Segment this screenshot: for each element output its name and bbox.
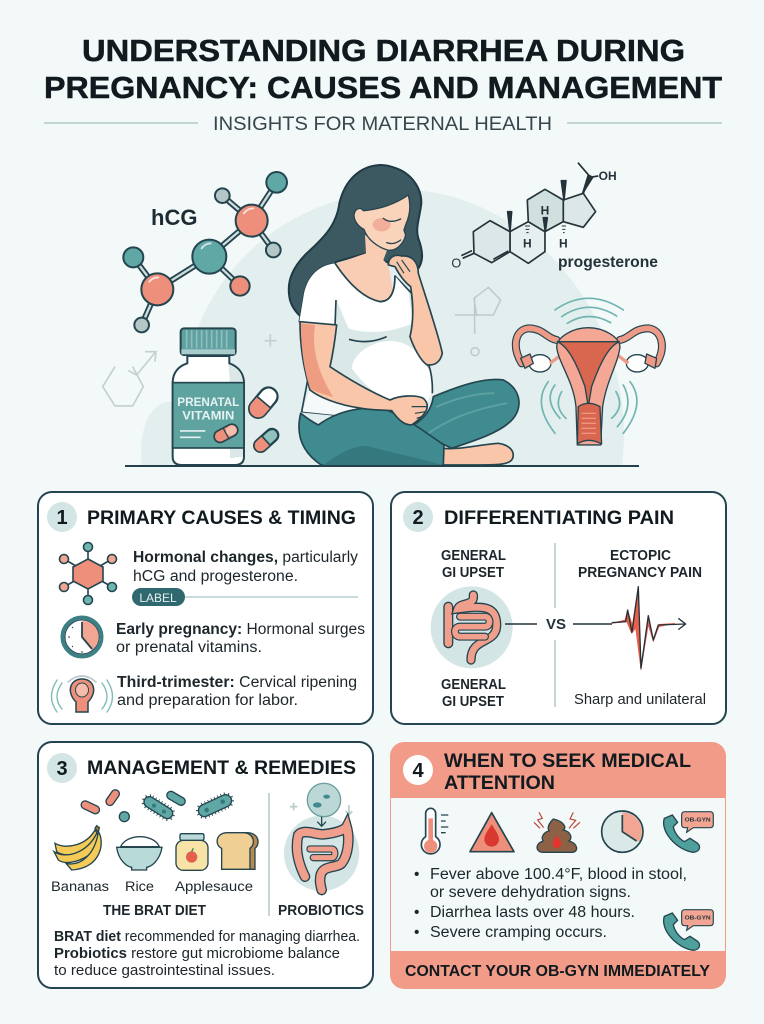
number badge 1 xyxy=(47,502,77,532)
number badge 1: 1 xyxy=(56,507,68,529)
heading 4: ATTENTION xyxy=(444,773,555,794)
text: third trimester: and preparation for labor. xyxy=(117,692,298,709)
heading 4 xyxy=(444,751,691,794)
label: general GI upset bottom: GI UPSET xyxy=(442,694,504,710)
icon: phone OB-GYN xyxy=(664,812,713,852)
text: early pregnancy: or prenatal vitamins. xyxy=(116,639,262,656)
front leg xyxy=(299,408,444,465)
icon: progesterone structure: OH xyxy=(599,169,617,183)
icon: clock 48 hours xyxy=(602,811,643,852)
panel 1: primary causes and timing xyxy=(38,492,373,724)
text: third trimester xyxy=(117,674,357,709)
foot xyxy=(442,443,513,465)
text: warning signs list: • xyxy=(414,924,419,941)
labels: foods: Rice xyxy=(125,878,154,894)
label pill xyxy=(132,588,358,606)
label: general GI upset top: GI UPSET xyxy=(442,565,504,581)
hair xyxy=(289,165,422,318)
icon: applesauce jar xyxy=(176,834,208,870)
text: warning signs list: Severe cramping occurs. xyxy=(430,924,607,941)
label: progesterone: progesterone xyxy=(558,254,658,271)
number badge 3: 3 xyxy=(56,758,68,780)
heading 2: DIFFERENTIATING PAIN xyxy=(444,508,674,529)
shirt white upper xyxy=(299,263,413,332)
title: PREGNANCY: CAUSES AND MANAGEMENT xyxy=(44,70,722,105)
illustration: pregnant woman xyxy=(289,165,519,465)
panel 4: when to seek medical attention xyxy=(390,742,726,989)
subtitle: INSIGHTS FOR MATERNAL HEALTH xyxy=(213,114,552,135)
shirt shaded base xyxy=(299,263,432,417)
icon: toast xyxy=(217,833,258,869)
shirt hem white xyxy=(303,380,363,415)
right arm and hand xyxy=(388,255,442,365)
title xyxy=(44,33,722,105)
number badge 2 xyxy=(403,502,433,532)
neck and chest xyxy=(335,235,392,302)
heading 1: PRIMARY CAUSES & TIMING xyxy=(87,508,356,529)
text: early pregnancy: Early pregnancy: Hormonal surges xyxy=(116,621,365,638)
icon: progesterone structure: H xyxy=(523,237,532,251)
text: hormonal changes xyxy=(133,549,358,585)
heading 3: MANAGEMENT & REMEDIES xyxy=(87,758,356,779)
icon: hCG molecule xyxy=(123,172,287,332)
icon: pain spike line xyxy=(612,587,686,670)
icon: stool with blood xyxy=(534,812,580,852)
belly xyxy=(352,341,432,405)
illustration background blob xyxy=(141,190,624,466)
icon: prenatal vitamin bottle xyxy=(173,328,282,465)
icon: gut bacteria xyxy=(80,788,234,822)
number badge 3 xyxy=(47,753,77,783)
text: management paragraph: BRAT diet recommended for managing diarrhea. xyxy=(54,929,360,945)
heading 4: WHEN TO SEEK MEDICAL xyxy=(444,751,691,772)
icon: probiotics colon xyxy=(284,783,359,891)
text: hormonal changes: hCG and progesterone. xyxy=(133,568,298,585)
text: sharp and unilateral: Sharp and unilateral xyxy=(574,692,706,708)
icon: progesterone structure: H xyxy=(541,204,549,218)
face xyxy=(354,195,410,250)
icon: phone OB-GYN second: OB-GYN xyxy=(685,916,711,922)
icon: hormone molecule xyxy=(60,542,116,604)
icon: bananas xyxy=(54,826,101,870)
text: management paragraph xyxy=(54,929,360,979)
icon: phone OB-GYN second xyxy=(664,910,713,950)
label: probiotics: PROBIOTICS xyxy=(278,903,364,919)
panel 2: differentiating pain xyxy=(391,492,726,724)
icon: thermometer xyxy=(421,808,448,854)
label: general GI upset bottom: GENERAL xyxy=(441,677,506,693)
icon: prenatal vitamin bottle: PRENATAL xyxy=(177,396,239,409)
label: ectopic pregnancy pain: ECTOPIC xyxy=(610,548,671,564)
text: warning signs list xyxy=(414,866,687,941)
vibration waves around uterus xyxy=(541,298,637,433)
labels: foods: Bananas xyxy=(51,878,109,894)
label: hCG: hCG xyxy=(151,205,197,230)
text: management paragraph: Probiotics restore gut microbiome balance xyxy=(54,946,340,962)
text: management paragraph: to reduce gastrointestinal issues. xyxy=(54,963,275,979)
icon: progesterone structure xyxy=(451,163,617,270)
text: warning signs list: Diarrhea lasts over 48 hours. xyxy=(430,904,635,921)
number badge 4: 4 xyxy=(412,760,424,782)
text: warning signs list: • xyxy=(414,866,419,883)
panel 3: management and remedies xyxy=(38,742,373,988)
labels: foods xyxy=(51,878,253,894)
icon: intestines xyxy=(431,586,513,668)
icon: clock xyxy=(62,618,102,656)
faint chemistry marks xyxy=(103,334,277,406)
VS connector xyxy=(505,616,612,633)
ground line xyxy=(125,465,639,467)
title: UNDERSTANDING DIARRHEA DURING xyxy=(82,33,685,68)
label: general GI upset top xyxy=(441,548,506,581)
labels: foods: Applesauce xyxy=(175,878,253,894)
text: third trimester: Third-trimester: Cervical ripening xyxy=(117,674,357,691)
icon: progesterone structure: O xyxy=(451,256,461,270)
icon: prenatal vitamin bottle: VITAMIN xyxy=(182,410,234,423)
text: warning signs list: or severe dehydration signs. xyxy=(430,884,631,901)
icon: warning drop xyxy=(470,813,514,852)
icon: uterus xyxy=(516,328,662,445)
label: the BRAT diet: THE BRAT DIET xyxy=(103,903,206,919)
label: ectopic pregnancy pain: PREGNANCY PAIN xyxy=(578,565,702,581)
label: ectopic pregnancy pain xyxy=(578,548,702,581)
faint pentagon mark xyxy=(455,287,501,356)
icon: cervix xyxy=(52,676,112,712)
shirt lines xyxy=(335,263,395,342)
text: early pregnancy xyxy=(116,621,365,656)
icon: progesterone structure: H xyxy=(559,236,568,250)
number badge 4 xyxy=(403,755,433,785)
text: hormonal changes: Hormonal changes, particularly xyxy=(133,549,358,566)
icon: rice bowl xyxy=(117,837,162,870)
label: general GI upset bottom xyxy=(441,677,506,710)
label: general GI upset top: GENERAL xyxy=(441,548,506,564)
left arm and hand on belly xyxy=(300,322,427,425)
text: warning signs list: • xyxy=(414,904,419,921)
VS connector: VS xyxy=(546,616,566,633)
icon: phone OB-GYN: OB-GYN xyxy=(685,818,711,824)
text: warning signs list: Fever above 100.4°F, blood in stool, xyxy=(430,866,687,883)
number badge 2: 2 xyxy=(412,507,424,529)
back leg xyxy=(412,379,519,448)
callout: contact OB-GYN: CONTACT YOUR OB-GYN IMMEDIATELY xyxy=(405,963,711,980)
label pill: LABEL xyxy=(139,591,177,605)
